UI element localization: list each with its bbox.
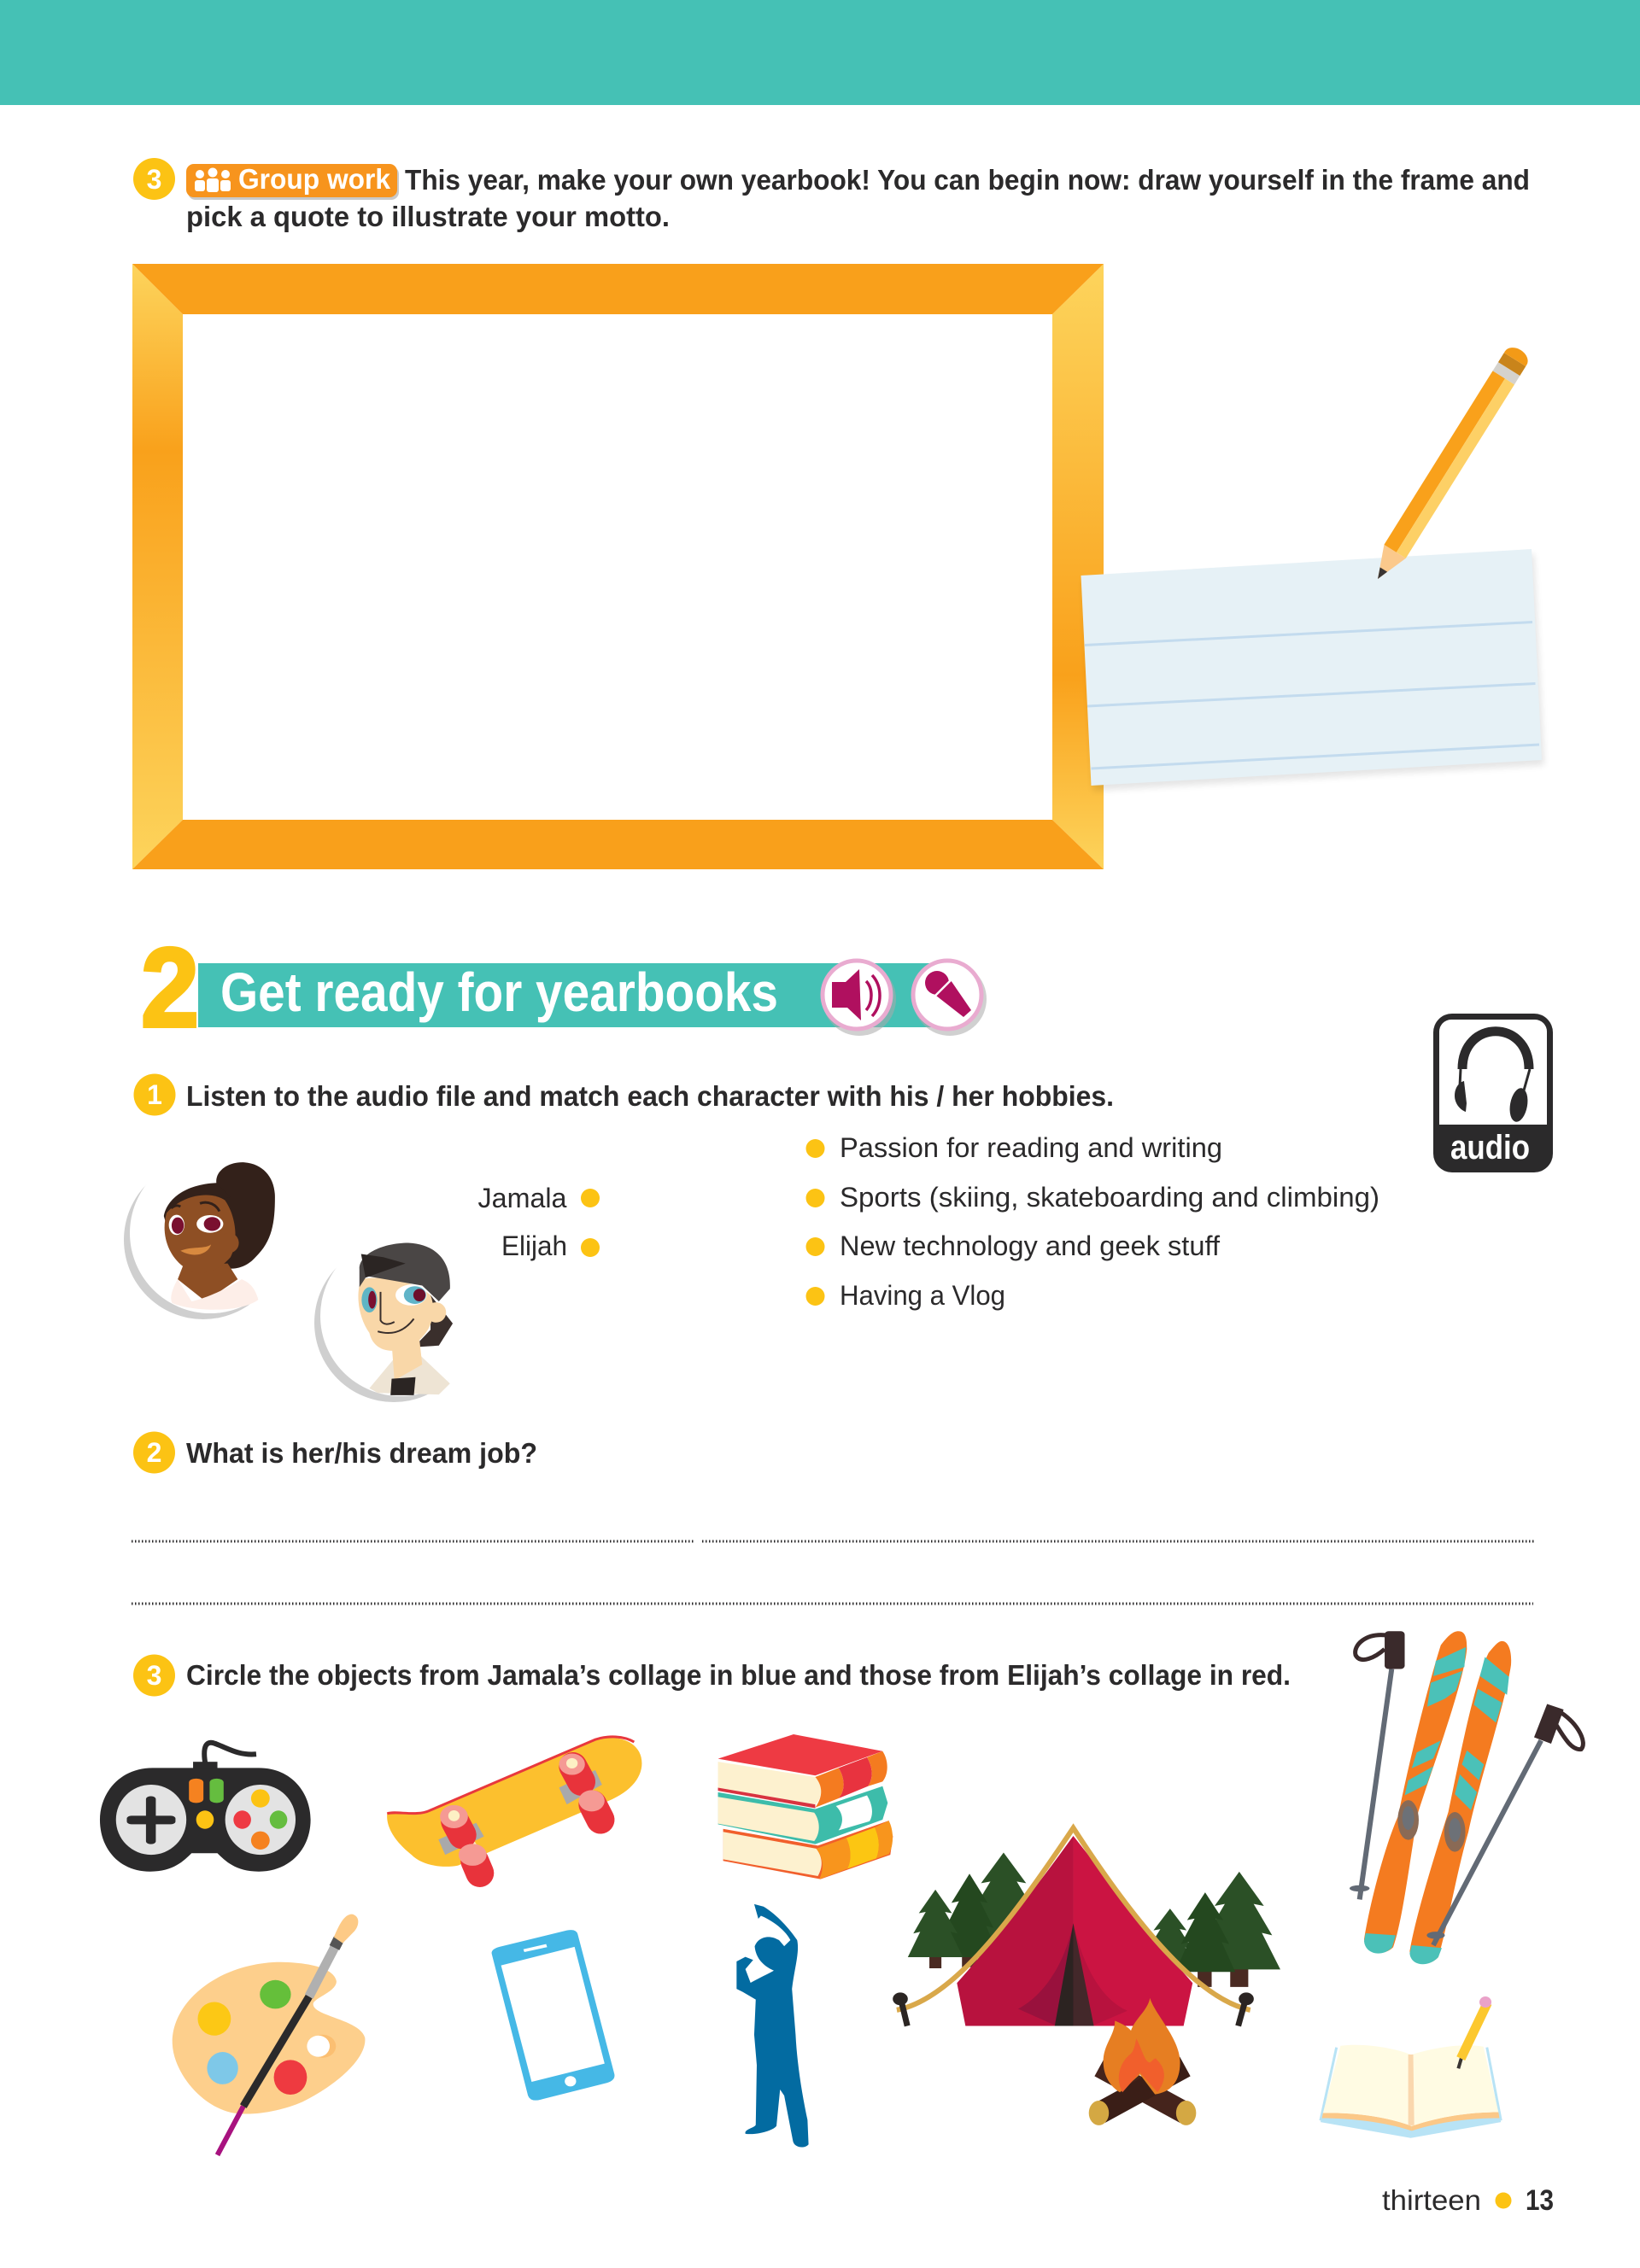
tent body xyxy=(957,1836,1074,2025)
number badge 2: 2 xyxy=(147,1437,161,1468)
left pole xyxy=(1350,1631,1405,1899)
section heading: get ready for yearbooks xyxy=(141,925,987,1050)
audio badge xyxy=(1433,1014,1553,1172)
icon: open notebook and pencil xyxy=(1321,1996,1501,2138)
number badge 1 xyxy=(133,1074,176,1115)
number badge 3: 3 xyxy=(147,1660,161,1691)
icon: books xyxy=(718,1734,893,1879)
exercise 2: dream job xyxy=(132,1431,1534,1604)
icon: campfire xyxy=(1089,1998,1196,2125)
hobbies list: Passion for reading and writing xyxy=(840,1132,1222,1163)
answer lines xyxy=(132,1541,1534,1604)
hobbies list: Having a Vlog xyxy=(840,1280,1005,1311)
big number 2: 2 xyxy=(141,925,199,1050)
instruction text: pick a quote to illustrate your motto. xyxy=(186,201,670,232)
pencil xyxy=(1367,343,1532,586)
hobbies list xyxy=(806,1132,1379,1311)
icon: smartphone xyxy=(492,1930,614,2101)
icon: tent with trees xyxy=(893,1828,1280,2025)
audio badge: audio xyxy=(1450,1129,1530,1166)
bottom book xyxy=(723,1821,893,1879)
number badge 2 xyxy=(133,1431,175,1474)
right pole xyxy=(1426,1704,1583,1945)
ski two xyxy=(1409,1641,1511,1964)
hobbies list: Sports (skiing, skateboarding and climbing) xyxy=(840,1182,1379,1213)
page number footer: 13 xyxy=(1526,2184,1554,2217)
number badge 1: 1 xyxy=(147,1079,162,1110)
exercise 1: match characters with hobbies xyxy=(124,1074,1379,1402)
instruction text: This year, make your own yearbook! You can begin now: draw yourself in the frame and xyxy=(405,164,1530,196)
question: What is her/his dream job? xyxy=(186,1437,537,1469)
character labels xyxy=(478,1183,600,1261)
tent pegs xyxy=(893,1992,1254,2025)
ski one xyxy=(1364,1631,1467,1953)
paint brush xyxy=(218,1914,358,2155)
character labels: Elijah xyxy=(501,1230,567,1261)
small pencil xyxy=(1458,1996,1491,2068)
instruction: Circle the objects from Jamala’s collage in blue and those from Elijah’s collage in red. xyxy=(186,1659,1291,1691)
number badge 3: 3 xyxy=(147,164,161,195)
number badge 3 xyxy=(133,1655,175,1696)
icon: game controller xyxy=(100,1743,311,1872)
group work tag xyxy=(186,163,399,200)
icon: speaker xyxy=(823,961,896,1036)
instruction: Listen to the audio file and match each character with his / her hobbies. xyxy=(186,1080,1114,1112)
hobbies list: New technology and geek stuff xyxy=(840,1230,1220,1261)
icon: headphones xyxy=(1455,1032,1530,1123)
icon: microphone xyxy=(913,961,987,1036)
group work instruction xyxy=(133,158,1530,232)
middle book xyxy=(718,1786,887,1844)
picture frame xyxy=(132,264,1104,869)
note paper xyxy=(1081,549,1544,791)
ski bindings xyxy=(1397,1800,1466,1852)
portrait: Elijah xyxy=(314,1236,481,1402)
top book xyxy=(718,1734,882,1775)
icon: paint palette xyxy=(173,1914,365,2155)
heading text: Get ready for yearbooks xyxy=(220,962,778,1023)
exercise 3: circle the objects xyxy=(133,1655,1291,1696)
header band xyxy=(0,0,1640,105)
number badge 3 xyxy=(133,158,175,200)
group work tag: Group work xyxy=(238,163,391,195)
teal banner xyxy=(198,963,931,1027)
page number footer: thirteen xyxy=(1382,2184,1481,2216)
character labels: Jamala xyxy=(478,1183,567,1213)
portrait: Jamala xyxy=(124,1153,290,1319)
trees xyxy=(908,1853,1280,1987)
icon: skis and poles xyxy=(1350,1631,1583,1964)
icon: person silhouette xyxy=(736,1904,809,2148)
icon: skateboard xyxy=(387,1737,641,1873)
instruction text xyxy=(186,164,1530,232)
page number footer xyxy=(1382,2184,1554,2217)
